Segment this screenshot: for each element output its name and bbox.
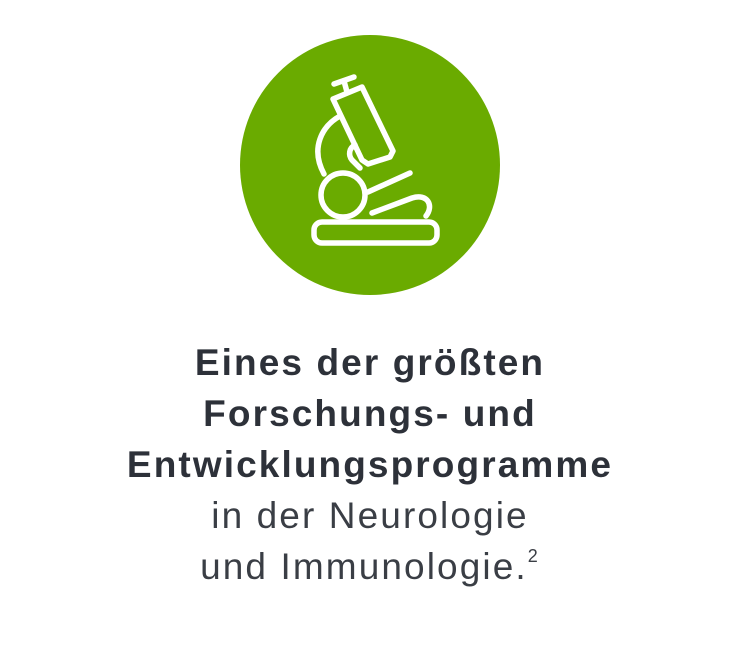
text block	[127, 342, 613, 587]
text block: und Immunologie.2	[200, 546, 540, 587]
icon: microscope in green circle	[240, 35, 500, 295]
microscope	[314, 77, 437, 243]
green circle	[240, 35, 500, 295]
text block: Eines der größten	[195, 342, 545, 383]
text block: Forschungs- und	[203, 393, 537, 434]
text block: in der Neurologie	[211, 495, 529, 536]
text block: Entwicklungsprogramme	[127, 444, 613, 485]
